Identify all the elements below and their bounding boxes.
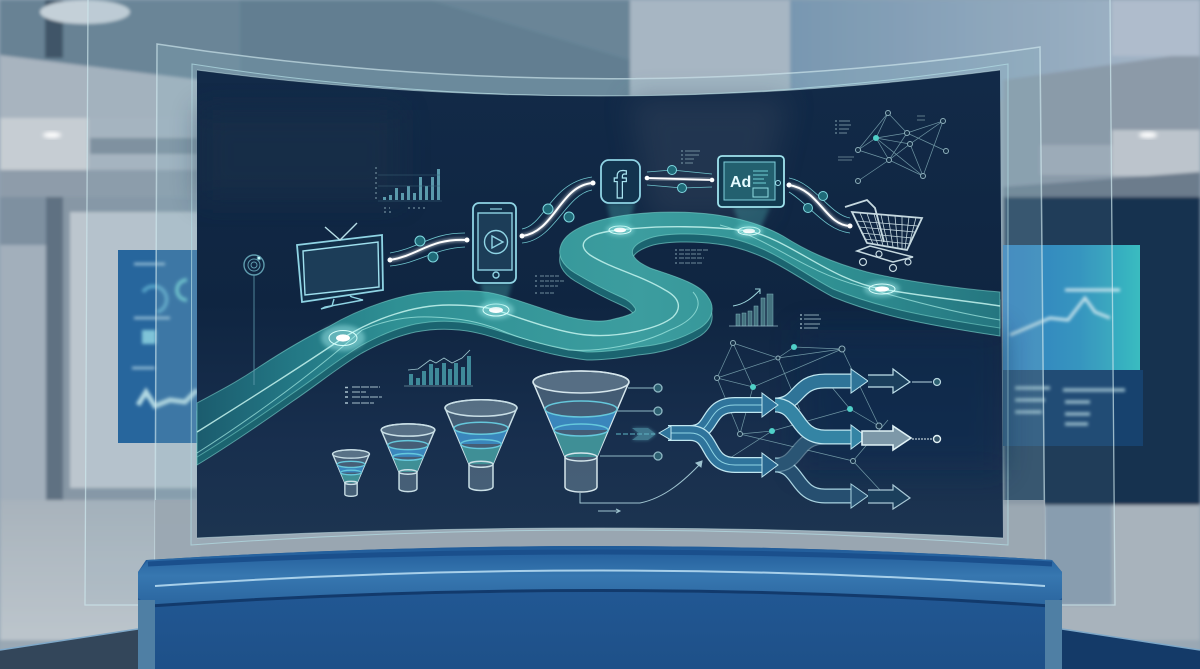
legend: list above facebook connector xyxy=(681,151,700,163)
network diagram: top right xyxy=(856,110,948,184)
output node upper xyxy=(912,378,940,386)
blue pedestal and floor base xyxy=(0,546,1200,669)
icon: tablet with ad xyxy=(718,156,784,207)
right wall screen xyxy=(1003,245,1143,446)
legend: list under road xyxy=(675,250,709,263)
funnel side labels xyxy=(600,384,662,460)
arrow: final middle highlighted xyxy=(862,426,911,450)
legend: list near phone xyxy=(535,276,564,293)
connector: TV to phone xyxy=(388,233,470,266)
legend: list near rising chart xyxy=(800,315,821,328)
curved flow arrow xyxy=(580,461,702,513)
glass lower band xyxy=(155,500,1045,565)
glass inner border xyxy=(191,64,1008,545)
dark display screen xyxy=(197,70,1003,538)
road surface xyxy=(197,212,1000,457)
bar chart: rising with arrow xyxy=(729,289,778,326)
legend: top network caption xyxy=(838,116,925,160)
network diagram: bottom right xyxy=(714,340,888,490)
legend: list near network xyxy=(835,121,851,133)
connector: Facebook to tablet xyxy=(645,166,714,192)
icon: smartphone with play button xyxy=(473,203,516,283)
inner curved glass panel xyxy=(155,44,1045,565)
icon: tablet with ad: Ad xyxy=(730,174,751,191)
road node 5 xyxy=(864,281,900,297)
icon: Facebook logo: f xyxy=(614,165,627,207)
lane line lower xyxy=(197,225,1000,453)
left wall screen xyxy=(118,250,198,443)
arrow: final upper xyxy=(868,369,910,393)
icon: shopping cart xyxy=(845,200,922,272)
ceiling light right xyxy=(1139,132,1157,138)
lane line main xyxy=(197,227,1000,432)
funnel 4 xyxy=(533,371,629,492)
arrows: lower branch stage two xyxy=(775,437,868,508)
funnel 2 xyxy=(381,424,435,492)
road node 3 xyxy=(606,224,634,236)
road side thickness xyxy=(197,220,1000,465)
teal customer journey road xyxy=(197,212,1000,465)
road node 1 xyxy=(321,325,365,351)
connector: tablet to cart xyxy=(786,178,852,233)
road node 2 xyxy=(478,301,514,319)
ceiling light left xyxy=(43,132,61,138)
legend: list above funnels xyxy=(345,387,382,403)
chevron input arrow xyxy=(616,428,656,440)
branching flow arrows xyxy=(659,369,940,509)
icon: television xyxy=(297,223,383,309)
light beams from icons to road xyxy=(480,203,770,308)
output node middle xyxy=(912,436,940,442)
arrows: first fork xyxy=(659,393,778,477)
icon: target marker with timeline xyxy=(244,255,264,385)
bar chart: top xyxy=(376,167,442,212)
outer glass panel xyxy=(85,0,1115,605)
icon: Facebook logo xyxy=(601,160,640,207)
road node 4 xyxy=(735,225,763,237)
arrows: upper branch stage two xyxy=(775,369,868,449)
glass overlays at screen edges xyxy=(197,70,1003,538)
connector: phone to Facebook xyxy=(520,177,596,243)
arrow: final lower xyxy=(868,485,910,509)
funnel 1 xyxy=(333,450,369,496)
bar chart: lower with trend line xyxy=(404,350,473,386)
funnel 3 xyxy=(445,400,517,490)
